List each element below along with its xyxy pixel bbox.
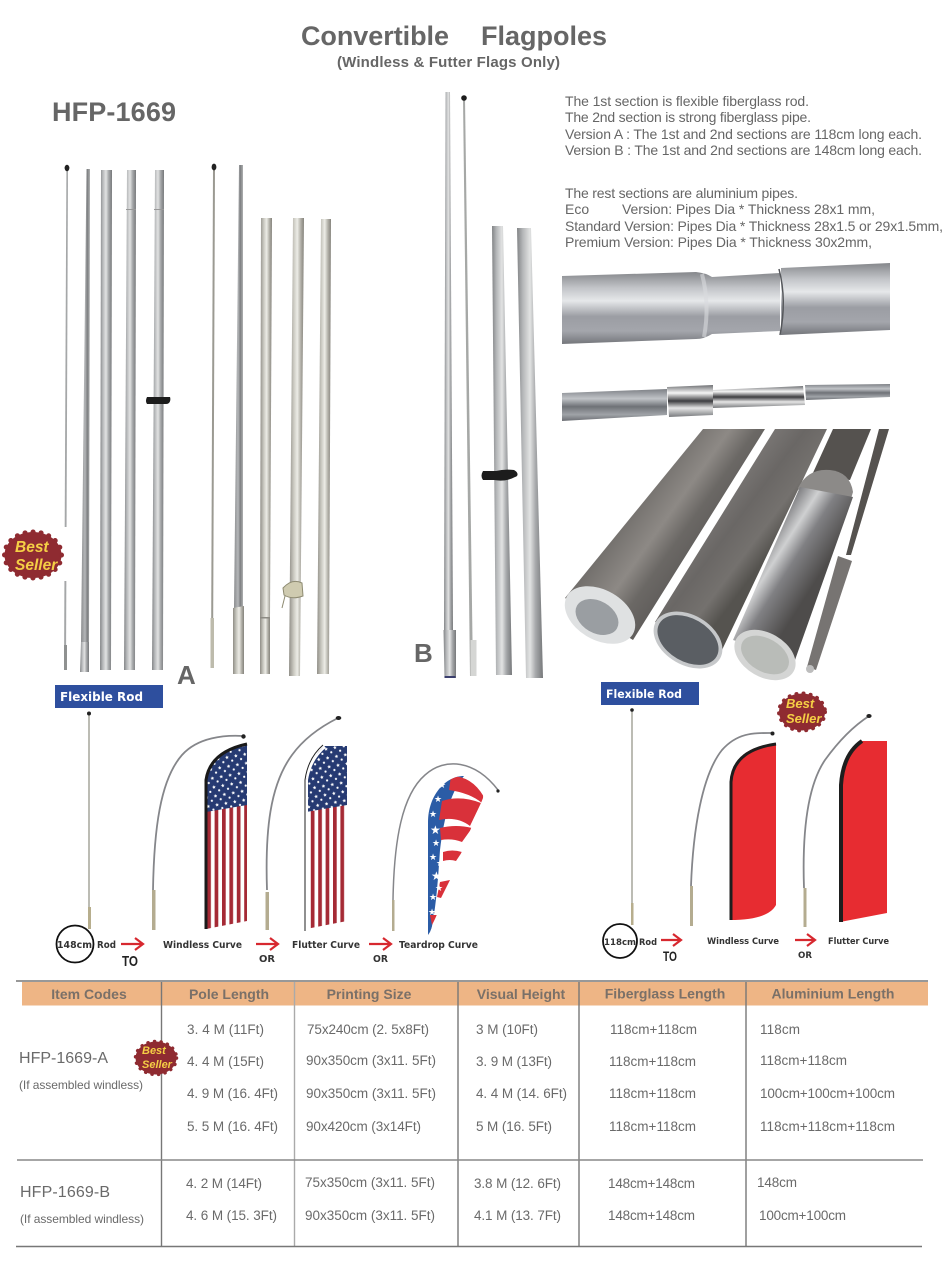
rod length callout: 118cm: [604, 938, 636, 948]
row: HFP-1669-A: (If assembled windless): [19, 1078, 143, 1092]
label box: flexible rod: [601, 682, 699, 705]
row: HFP-1669-A: 4. 9 M (16. 4Ft): [187, 1086, 278, 1101]
table header: Pole Length: [189, 986, 269, 1002]
best seller badge: table: Best: [142, 1045, 167, 1057]
table header: Fiberglass Length: [605, 986, 725, 1002]
tube: thick wall: [555, 429, 765, 656]
row: HFP-1669-B: 3.8 M (12. 6Ft): [474, 1176, 561, 1191]
flag: teardrop stars and stripes: ★: [438, 780, 446, 790]
step label: teardrop curve: Teardrop Curve: [399, 940, 478, 951]
flag: teardrop stars and stripes: ★: [428, 907, 436, 917]
flag: teardrop stars and stripes: ★: [436, 858, 444, 868]
step label: flutter curve: Flutter Curve: [292, 940, 360, 951]
row: HFP-1669-A: 118cm+118cm: [609, 1054, 696, 1069]
row: HFP-1669-B: 90x350cm (3x11. 5Ft): [305, 1208, 435, 1223]
TO label: TO: [122, 953, 138, 970]
row: HFP-1669-B: [20, 1175, 846, 1226]
arrow: [256, 938, 278, 950]
row: HFP-1669-A: 3 M (10Ft): [476, 1022, 538, 1037]
flutter curve pole: [804, 714, 872, 927]
flag: teardrop stars and stripes: [428, 776, 484, 935]
title: Flagpoles: [481, 21, 607, 51]
specification text: Premium Version: Pipes Dia * Thickness 30x2mm,: [565, 234, 872, 250]
best seller badge: table: [136, 1042, 176, 1074]
letter A: A: [177, 660, 196, 690]
windless curve pole: [152, 734, 246, 930]
photo: thin pipe connector: [562, 384, 890, 421]
best seller badge: right: Seller: [786, 711, 822, 726]
specification text: The 1st section is flexible fiberglass rod.: [565, 93, 809, 109]
pole set two: [210, 164, 331, 676]
row: HFP-1669-A: 100cm+100cm+100cm: [760, 1086, 895, 1101]
flag: teardrop stars and stripes: ★: [432, 838, 440, 848]
specification text: [565, 93, 943, 250]
flag: windless red: [730, 743, 776, 920]
beige flag clip on pole: [282, 581, 303, 608]
row: HFP-1669-A: 118cm: [760, 1022, 800, 1037]
specification text: Eco: [565, 201, 589, 217]
title: Convertible: [301, 21, 449, 51]
subtitle: (Windless & Futter Flags Only): [337, 54, 560, 71]
label box: flexible rod: [55, 685, 163, 708]
row: HFP-1669-A: 4. 4 M (15Ft): [187, 1054, 264, 1069]
rod length callout: Rod: [639, 938, 657, 948]
flag: teardrop stars and stripes: ★: [429, 809, 437, 819]
flag: teardrop stars and stripes: ★: [434, 794, 442, 804]
row: HFP-1669-A: 90x350cm (3x11. 5Ft): [306, 1053, 436, 1068]
arrow: [795, 934, 815, 946]
OR label: OR: [373, 954, 389, 965]
row: HFP-1669-A: 90x350cm (3x11. 5Ft): [306, 1086, 436, 1101]
rod length callout: Rod: [97, 940, 116, 951]
black flag clip on pole: [482, 470, 518, 481]
arrow: [661, 934, 681, 946]
row: HFP-1669-A: 118cm+118cm: [760, 1053, 847, 1068]
table header: [16, 981, 928, 1006]
tube: telescoped sleeve: [725, 429, 871, 691]
row: HFP-1669-A: 118cm+118cm: [610, 1022, 697, 1037]
specification text: Version A : The 1st and 2nd sections are 118cm long each.: [565, 126, 922, 142]
row: HFP-1669-A: 3. 4 M (11Ft): [187, 1022, 264, 1037]
row: HFP-1669-A: 90x420cm (3x14Ft): [306, 1119, 421, 1134]
rod length callout: [603, 924, 657, 958]
photo: aluminium tube cross-sections: [555, 429, 889, 691]
specification text: The rest sections are aluminium pipes.: [565, 185, 798, 201]
specification text: Version B : The 1st and 2nd sections are 148cm long each.: [565, 142, 922, 158]
product photo: version B poles: [444, 92, 543, 678]
row: HFP-1669-A: 75x240cm (2. 5x8Ft): [307, 1022, 429, 1037]
flag: flutter red: [840, 741, 887, 922]
OR label: OR: [798, 951, 812, 961]
row: HFP-1669-A: 118cm+118cm+118cm: [760, 1119, 895, 1134]
step label: windless curve: Windless Curve: [163, 940, 242, 951]
row: HFP-1669-B: 148cm: [757, 1175, 797, 1190]
row: HFP-1669-B: 4.1 M (13. 7Ft): [474, 1208, 561, 1223]
rod length callout: [56, 926, 116, 962]
specification text: Standard Version: Pipes Dia * Thickness 28x1.5 or 29x1.5mm,: [565, 218, 943, 234]
letter B: B: [414, 638, 433, 668]
arrow: [121, 938, 143, 950]
best seller badge: right: [779, 694, 825, 730]
teardrop curve pole: [392, 764, 500, 931]
title: [301, 21, 607, 51]
row: HFP-1669-B: 4. 6 M (15. 3Ft): [186, 1208, 277, 1223]
row: HFP-1669-B: 148cm+148cm: [608, 1208, 695, 1223]
pole set one: [62, 165, 164, 672]
flag: windless stars and stripes: [206, 744, 247, 930]
row: HFP-1669-B: 100cm+100cm: [759, 1208, 846, 1223]
straight rod: [630, 708, 634, 925]
row: HFP-1669-B: (If assembled windless): [20, 1212, 144, 1226]
windless curve pole: [690, 732, 774, 926]
flag: teardrop stars and stripes: ★: [429, 852, 437, 862]
row: HFP-1669-A: 4. 4 M (14. 6Ft): [476, 1086, 567, 1101]
rod: [806, 429, 889, 673]
specification text: The 2nd section is strong fiberglass pipe.: [565, 109, 811, 125]
TO label: TO: [663, 948, 677, 964]
best seller badge: table: Seller: [142, 1059, 173, 1071]
row: HFP-1669-A: 5 M (16. 5Ft): [476, 1119, 552, 1134]
arrow: [369, 938, 391, 950]
table grid: [16, 982, 923, 1246]
label box: flexible rod: Flexible Rod: [606, 687, 682, 701]
table header: Aluminium Length: [772, 986, 894, 1002]
label box: flexible rod: Flexible Rod: [60, 689, 143, 704]
diagram: version A flexible rod to curves: [55, 685, 500, 970]
flag: teardrop stars and stripes: ★: [430, 823, 441, 837]
best seller badge: left: Seller: [15, 557, 58, 574]
flag: flutter stars and stripes: [305, 744, 348, 931]
row: HFP-1669-B: 75x350cm (3x11. 5Ft): [305, 1175, 435, 1190]
step label: windless curve: Windless Curve: [707, 937, 779, 947]
best seller badge: right: Best: [786, 696, 815, 711]
rod length callout: 148cm: [57, 940, 92, 951]
row: HFP-1669-B: HFP-1669-B: [20, 1184, 110, 1201]
step label: flutter curve: Flutter Curve: [828, 937, 889, 947]
tube: thin wall: [643, 429, 827, 680]
flag: teardrop stars and stripes: ★: [435, 883, 443, 893]
specification table: [16, 981, 928, 1246]
table header: Printing Size: [327, 986, 412, 1002]
flag: teardrop stars and stripes: ★: [429, 892, 437, 902]
specification text: Version: Pipes Dia * Thickness 28x1 mm,: [622, 201, 875, 217]
row: HFP-1669-A: HFP-1669-A: [19, 1050, 108, 1067]
row: HFP-1669-B: 148cm+148cm: [608, 1176, 695, 1191]
OR label: OR: [259, 954, 276, 965]
diagram: version B flexible rod to curves: [601, 682, 889, 964]
best seller badge: left: [4, 532, 62, 578]
row: HFP-1669-A: 3. 9 M (13Ft): [476, 1054, 552, 1069]
row: HFP-1669-A: [19, 1022, 895, 1134]
flutter curve pole: [266, 716, 341, 930]
best seller badge: left: Best: [15, 539, 49, 556]
row: HFP-1669-A: 118cm+118cm: [609, 1086, 696, 1101]
flag: teardrop stars and stripes: ★: [431, 869, 442, 883]
row: HFP-1669-A: 118cm+118cm: [609, 1119, 696, 1134]
black flag clip on pole: [146, 397, 170, 404]
product photo: version A poles: [62, 164, 331, 676]
table header: Item Codes: [51, 986, 127, 1002]
photo: swaged pipe joint: [562, 263, 890, 344]
row: HFP-1669-A: 5. 5 M (16. 4Ft): [187, 1119, 278, 1134]
model heading: HFP-1669: [52, 97, 176, 127]
straight rod: [87, 712, 91, 929]
table header: Visual Height: [477, 986, 566, 1002]
row: HFP-1669-B: 4. 2 M (14Ft): [186, 1176, 262, 1191]
